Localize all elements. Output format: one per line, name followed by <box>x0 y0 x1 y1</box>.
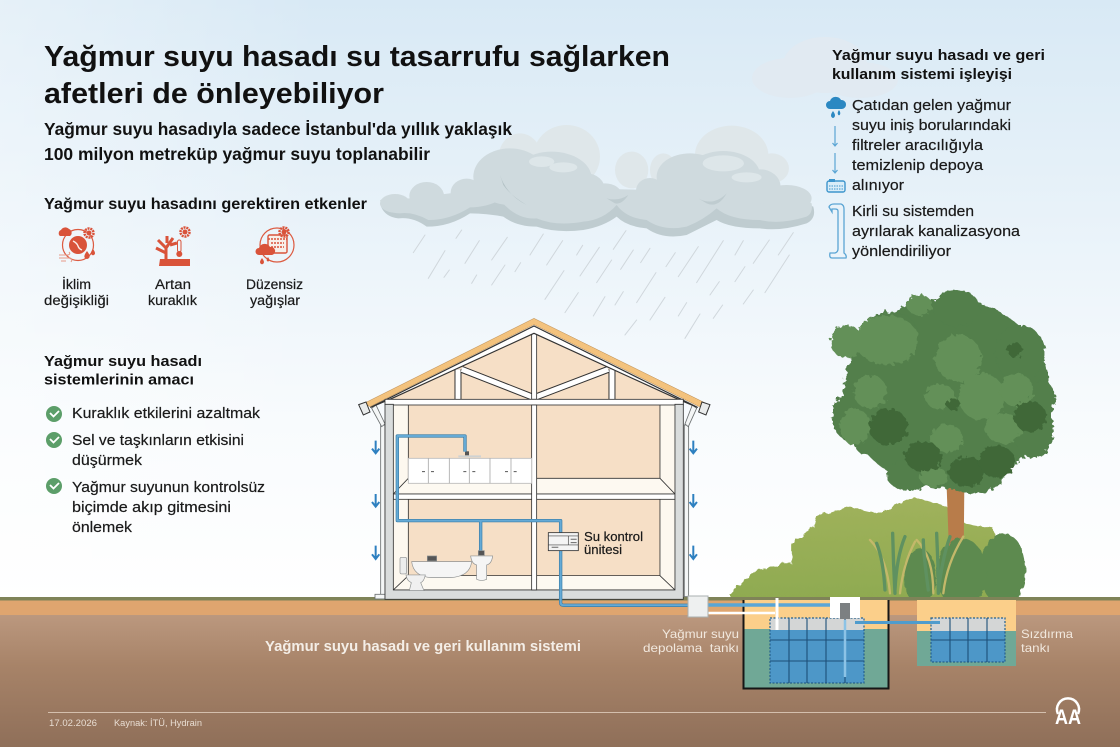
purposes checklist: Sel ve taşkınların etkisini <box>72 433 244 449</box>
system description text: yönlendiriliyor <box>852 244 951 260</box>
label: system name: Yağmur suyu hasadı ve geri kullanım sistemi <box>265 639 581 655</box>
heading: how the system works <box>832 47 1045 83</box>
house cross-section <box>359 318 710 605</box>
subtitle <box>44 119 512 164</box>
footer date and source <box>49 718 202 728</box>
label: storage tank <box>643 627 739 655</box>
system description text: alınıyor <box>852 178 904 194</box>
factor labels: Artan <box>155 277 191 292</box>
system description text: Çatıdan gelen yağmur <box>852 98 1011 114</box>
centre post <box>532 405 537 590</box>
infiltration tank blocks <box>931 618 1005 662</box>
title: Yağmur suyu hasadı su tasarrufu sağlarken <box>44 41 670 73</box>
purposes checklist: Kuraklık etkilerini azaltmak <box>72 406 261 422</box>
system description text: temizlenip depoya <box>852 158 984 174</box>
downpipe arrows <box>372 441 697 559</box>
label: infiltration tank: Sızdırma <box>1021 627 1073 641</box>
footer rule <box>48 712 1046 713</box>
small shrubs <box>904 533 1026 608</box>
ground soil <box>0 597 1120 747</box>
purposes checklist <box>46 406 265 536</box>
system description text: filtreler aracılığıyla <box>852 138 984 154</box>
subtitle: 100 milyon metreküp yağmur suyu toplanabilir <box>44 144 430 164</box>
attic <box>388 333 680 399</box>
faint background cloud top right <box>752 37 898 98</box>
heading: purposes <box>44 353 202 388</box>
label: water control unit: Su kontrol <box>584 530 643 544</box>
footer date and source: Kaynak: İTÜ, Hydrain <box>114 718 202 728</box>
infiltration tank pit <box>917 600 1016 666</box>
system description text: suyu iniş borularındaki <box>852 118 1011 134</box>
check icons <box>46 406 62 494</box>
heading: how the system works: Yağmur suyu hasadı ve geri <box>832 47 1045 64</box>
icon: climate change <box>59 227 95 262</box>
tree trunk <box>947 487 964 597</box>
system description text: ayrılarak kanalizasyona <box>852 224 1021 240</box>
rain cloud <box>380 125 814 236</box>
cloud highlights <box>529 155 762 182</box>
label: infiltration tank: tankı <box>1021 641 1050 655</box>
cabinets <box>408 451 532 483</box>
gutters <box>359 402 710 415</box>
system description text: Kirli su sistemden <box>852 204 974 220</box>
icon: drought <box>156 228 190 266</box>
factor labels: Düzensiz <box>246 277 303 292</box>
storage tank blocks <box>770 618 864 683</box>
floors <box>393 478 675 590</box>
purposes checklist: önlemek <box>72 520 133 536</box>
rafters <box>371 326 697 407</box>
purposes checklist: biçimde akıp gitmesini <box>72 500 231 516</box>
purposes checklist: düşürmek <box>72 453 143 469</box>
cloud puffs <box>380 148 812 213</box>
cloud shadow <box>380 197 814 236</box>
logo: AA: AA <box>1055 706 1081 729</box>
heading: purposes: Yağmur suyu hasadı <box>44 353 202 370</box>
rain <box>413 230 793 338</box>
label: water control unit <box>584 530 643 557</box>
title <box>44 41 670 110</box>
icon: drain pipe <box>829 204 846 258</box>
grass blades <box>870 533 963 593</box>
truss <box>458 369 612 399</box>
factor labels: kuraklık <box>148 293 197 308</box>
factor labels: değişikliği <box>44 293 109 308</box>
label: storage tank: depolama tankı <box>643 641 739 655</box>
factor labels <box>44 277 303 308</box>
purposes checklist: Yağmur suyunun kontrolsüz <box>72 480 265 496</box>
back walls <box>408 405 660 576</box>
subtitle: Yağmur suyu hasadıyla sadece İstanbul'da yıllık yaklaşık <box>44 119 512 139</box>
water pipes <box>397 436 689 605</box>
label: water control unit: ünitesi <box>584 543 622 557</box>
bathroom fixtures <box>400 551 493 591</box>
interior <box>393 405 675 590</box>
ceiling beam <box>385 399 683 405</box>
heading: factors: Yağmur suyu hasadını gerektiren etkenler <box>44 196 367 213</box>
heading: purposes: sistemlerinin amacı <box>44 372 194 388</box>
water control unit <box>548 533 578 551</box>
vegetation: tree and bushes <box>730 290 1055 608</box>
factor labels: yağışlar <box>250 293 301 308</box>
system description text <box>852 98 1021 260</box>
tree crown <box>831 290 1055 493</box>
heading: how the system works: kullanım sistemi işleyişi <box>832 66 1012 83</box>
cloud creases <box>500 175 527 205</box>
outer walls <box>385 404 683 599</box>
icon: rain cloud with drops and arrows to tank <box>826 97 846 192</box>
title: afetleri de önleyebiliyor <box>44 78 384 110</box>
logo: AA <box>1055 698 1081 729</box>
footer date and source: 17.02.2026 <box>49 718 97 728</box>
back lobes <box>498 125 789 188</box>
downpipes <box>372 405 697 599</box>
storage tank pit <box>743 600 889 688</box>
label: infiltration tank <box>1021 627 1073 655</box>
icon: irregular rainfall <box>256 228 294 264</box>
underground pipes and filter <box>688 596 940 630</box>
factor labels: İklim <box>62 277 91 292</box>
label: storage tank: Yağmur suyu <box>662 627 739 641</box>
cloud body <box>380 187 812 228</box>
bush <box>730 497 1013 603</box>
roof edge <box>364 318 706 407</box>
